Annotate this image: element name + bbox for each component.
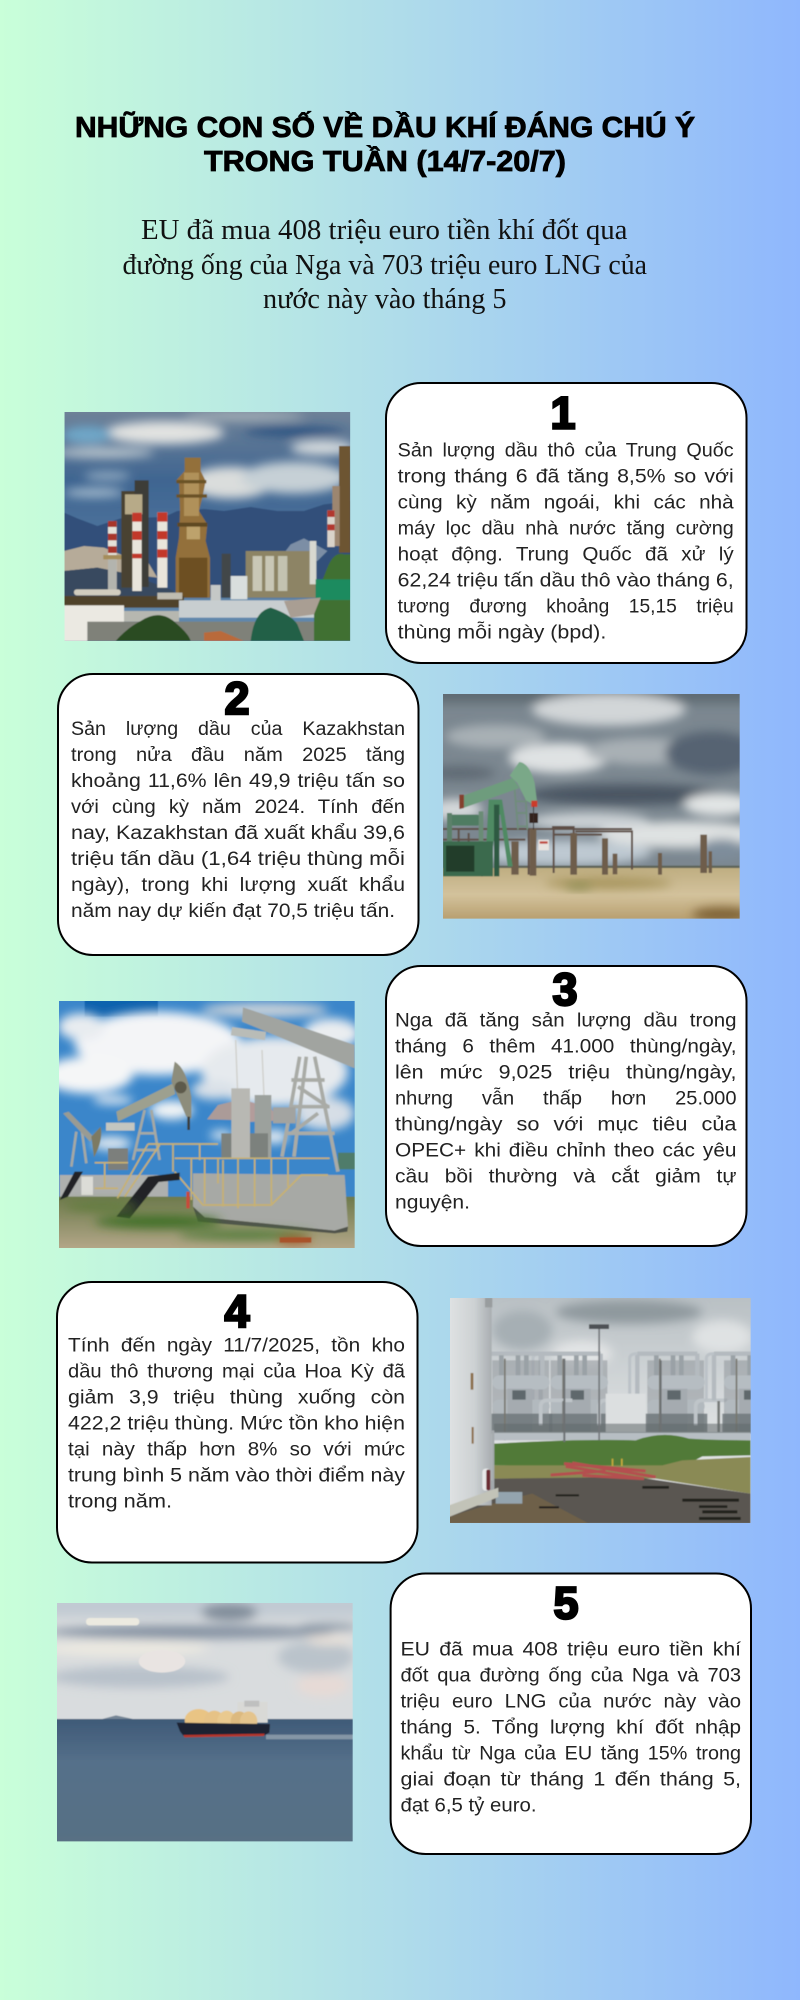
panel 2 — [58, 673, 418, 955]
body text: 422,2 triệu thùng. Mức tồn kho hiện — [68, 1413, 405, 1434]
body text: nguyện. — [395, 1193, 470, 1214]
body text: Sản lượng dầu của Kazakhstan — [71, 719, 405, 740]
subtitle — [122, 214, 647, 315]
body text: tháng 5. Tổng lượng khí đốt nhập — [400, 1717, 741, 1738]
body text: đạt 6,5 tỷ euro. — [400, 1795, 536, 1816]
panel 5 — [391, 1574, 751, 1854]
body text: nay, Kazakhstan đã xuất khẩu 39,6 — [71, 823, 405, 844]
body text: với cùng kỳ năm 2024. Tính đến — [71, 797, 405, 818]
body text — [68, 1335, 406, 1512]
body text: đốt qua đường ống của Nga và 703 — [400, 1665, 741, 1686]
body text: hoạt động. Trung Quốc đã xử lý — [398, 545, 734, 566]
subtitle: nước này vào tháng 5 — [263, 283, 506, 315]
body text: tháng 6 thêm 41.000 thùng/ngày, — [395, 1037, 736, 1058]
body text: máy lọc dầu nhà nước tăng cường — [398, 519, 734, 540]
body text: 62,24 triệu tấn dầu thô vào tháng 6, — [398, 571, 734, 592]
body text: trong nửa đầu năm 2025 tăng — [71, 745, 405, 766]
body text: triệu euro LNG của nước này vào — [400, 1691, 741, 1712]
body text: cùng kỳ năm ngoái, khi các nhà — [398, 493, 734, 514]
body text: Tính đến ngày 11/7/2025, tồn kho — [68, 1335, 405, 1356]
title: TRONG TUẦN (14/7-20/7) — [204, 144, 566, 178]
photo: gas storage plant — [450, 1298, 751, 1523]
body text: cầu bồi thường và cắt giảm tự — [395, 1166, 737, 1188]
body text: trong năm. — [68, 1491, 172, 1512]
body text: khẩu từ Nga của EU tăng 15% trong — [400, 1743, 741, 1764]
photo: LNG tanker at sea — [57, 1603, 353, 1842]
subtitle: EU đã mua 408 triệu euro tiền khí đốt qua — [141, 214, 628, 246]
title — [75, 110, 695, 178]
body text: Nga đã tăng sản lượng dầu trong — [395, 1011, 736, 1032]
body text: thùng mỗi ngày (bpd). — [398, 622, 606, 644]
body text: trung bình 5 năm vào thời điểm này — [68, 1465, 406, 1486]
body text: dầu thô thương mại của Hoa Kỳ đã — [68, 1361, 405, 1382]
number 1: 1 — [550, 388, 576, 438]
body text: nhưng vẫn thấp hơn 25.000 — [395, 1088, 736, 1110]
body text: tương đương khoảng 15,15 triệu — [398, 597, 734, 618]
body text: triệu tấn dầu (1,64 triệu thùng mỗi — [71, 848, 405, 870]
body text: thùng/ngày so với mục tiêu của — [395, 1115, 737, 1136]
body text: tại này thấp hơn 8% so với mức — [68, 1439, 405, 1460]
panel 3 — [386, 964, 746, 1246]
body text — [398, 441, 734, 644]
body text: OPEC+ khi điều chỉnh theo các yêu — [395, 1141, 736, 1162]
card background — [58, 674, 418, 955]
subtitle: đường ống của Nga và 703 triệu euro LNG của — [122, 249, 647, 281]
card background — [386, 383, 746, 663]
card background — [386, 966, 746, 1246]
body text: giảm 3,9 triệu thùng xuống còn — [68, 1387, 405, 1408]
number 5: 5 — [553, 1578, 579, 1629]
body text: EU đã mua 408 triệu euro tiền khí — [400, 1639, 742, 1660]
body text: khoảng 11,6% lên 49,9 triệu tấn so — [71, 771, 405, 792]
photo: pumpjack in a field — [443, 694, 740, 919]
number 4: 4 — [224, 1286, 250, 1337]
panel 4 — [57, 1282, 418, 1562]
photo: refinery — [54, 411, 354, 643]
title: NHỮNG CON SỐ VỀ DẦU KHÍ ĐÁNG CHÚ Ý — [75, 110, 695, 144]
body text — [400, 1639, 742, 1816]
card background — [57, 1282, 418, 1562]
photo: pumpjacks under blue sky — [43, 1000, 360, 1250]
body text — [395, 1011, 737, 1214]
body text: ngày), trong khi lượng xuất khẩu — [71, 875, 405, 896]
panel 1 — [386, 383, 746, 663]
body text: Sản lượng dầu thô của Trung Quốc — [398, 441, 734, 462]
body text: trong tháng 6 đã tăng 8,5% so với — [398, 467, 734, 488]
body text: năm nay dự kiến đạt 70,5 triệu tấn. — [71, 901, 395, 922]
number 3: 3 — [552, 964, 578, 1015]
body text — [71, 719, 405, 922]
body text: giai đoạn từ tháng 1 đến tháng 5, — [400, 1769, 741, 1790]
card background — [391, 1574, 751, 1854]
body text: lên mức 9,025 triệu thùng/ngày, — [395, 1063, 736, 1084]
number 2: 2 — [224, 673, 250, 724]
